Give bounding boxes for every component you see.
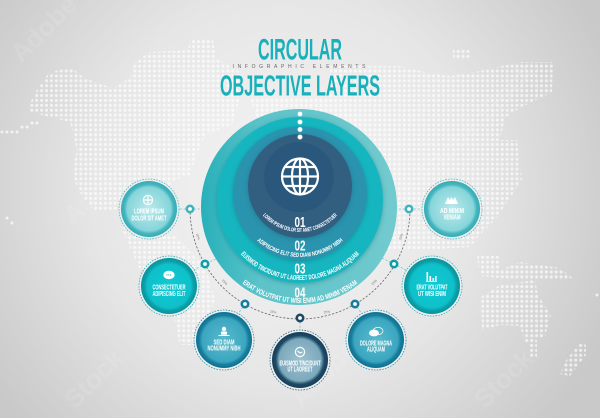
circle: ad minim: AD MINIM [440,206,464,215]
circle: dolore magna: DOLORE MAGNA [360,338,392,348]
circle: lorem ipsum: DOLOR SIT AMET [132,214,167,222]
title: CIRCULAR [258,34,342,66]
panel: concentric layers [201,109,397,305]
layer labels: 04 [294,284,306,302]
step markers [298,112,302,139]
layer 02 [233,126,367,260]
circle: euismod: EUISMOD TINCIDUNT [280,358,321,368]
icon: globe [282,158,318,194]
layer labels: 03 [294,260,306,278]
circle: erat volutpat: UT WISI ENIM [418,289,446,298]
icon: chat bubbles [369,327,383,336]
arc percentage labels: 25% [371,279,378,286]
layer 03 [217,117,383,283]
arc percentage labels: 25% [398,233,404,240]
layer labels: ERAT VOLUTPAT UT WISI ENIM AD MINIM VENAM [242,280,358,304]
circle: ad minim: VENIAM [444,212,460,222]
icon: circular arrow [295,347,305,357]
layer labels [240,212,360,304]
circle: sed diam: SED DIAM [214,338,234,346]
layer labels: 02 [294,238,306,254]
circle: dolore magna [346,310,406,370]
layer labels: EUISMOD TINCIDUNT UT LAOREET DOLORE MAGNA ALIQUAM [240,251,360,280]
watermark: Adobe Stock [407,56,541,190]
circle: consectetuer [139,256,199,316]
layer labels: LOREM IPSUM DOLOR SIT AMET CONSECTETUER [263,212,338,232]
arc percentage labels: 25% [323,310,330,314]
watermark: Adobe Stock [57,96,191,230]
circle: sed diam: NONUMMY NIBH [208,344,240,352]
icon: bar chart [426,272,437,282]
icon: globe small [143,195,153,205]
circle: erat volutpat: ERAT VOLUTPAT [416,282,448,292]
arc percentage labels: 25% [195,233,201,240]
layer 04 [201,109,397,305]
circle: lorem ipsum [119,179,179,239]
circle: ad minim [422,179,482,239]
layer 01 [248,134,352,238]
watermark: Stock [468,343,540,414]
circle: consectetuer: CONSECTETUER [152,282,186,292]
arc percentage labels [195,233,404,314]
dashed connector arc [176,209,424,332]
circle: sed diam [194,310,254,370]
circle: dolore magna: ALIQUAM [367,344,385,354]
circle: euismod [270,330,330,390]
icon: person [218,327,230,336]
circle: erat volutpat [402,256,462,316]
watermark: Stock [58,343,130,414]
watermark: Adobe [284,334,363,413]
title [220,34,380,102]
circle: consectetuer: ADIPISCING ELIT [152,289,186,298]
layer labels: 01 [294,214,306,231]
title: INFOGRAPHIC ELEMENTS [232,64,366,70]
arc percentage labels: 25% [270,310,277,314]
arc nodes [187,206,412,321]
layer labels: ADIPISCING ELIT SED DIAM NONUMMY NIBH [257,238,343,257]
title: OBJECTIVE LAYERS [220,70,380,102]
circle: euismod: UT LAOREET [288,364,313,374]
circle: lorem ipsum: LOREM IPSUM [134,206,164,216]
arc percentage labels: 25% [221,279,228,286]
icon: mountains [445,197,458,204]
icon: chat bubble [163,271,175,279]
